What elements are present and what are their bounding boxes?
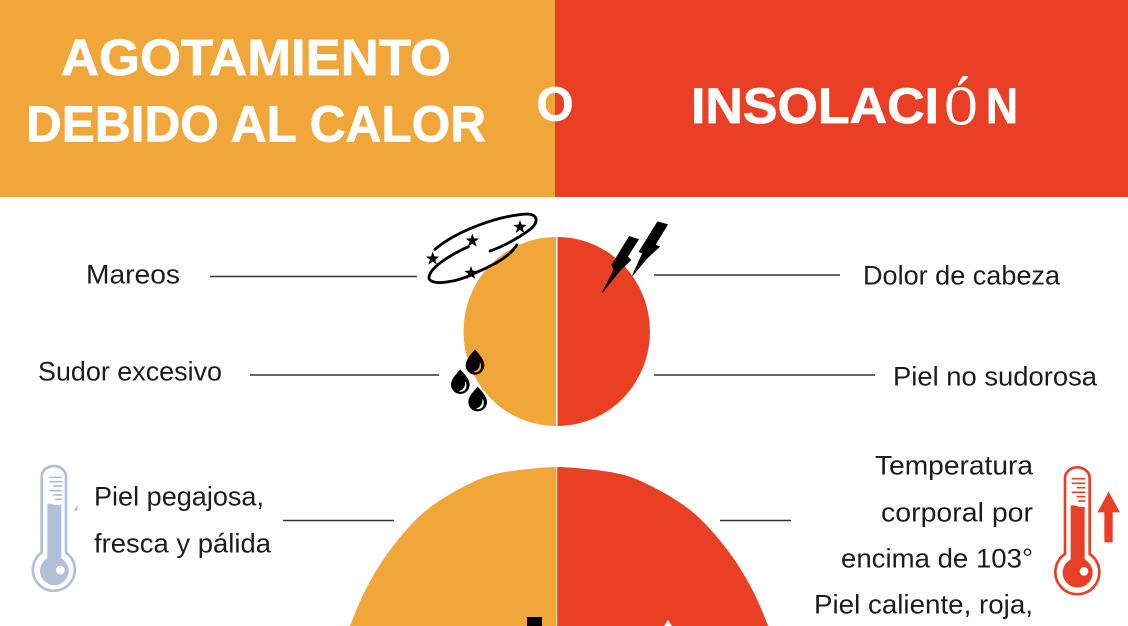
icon: cool thermometer xyxy=(33,466,77,591)
icon: sweat drops xyxy=(451,349,487,411)
label: dolor de cabeza: Dolor de cabeza xyxy=(863,260,1061,290)
icon: dizzy stars halo xyxy=(426,214,536,283)
body: left half xyxy=(350,467,556,626)
label: piel caliente, roja: Piel caliente, roja, xyxy=(814,590,1033,620)
icon: hot thermometer with arrow xyxy=(1055,467,1120,594)
label: piel no sudorosa: Piel no sudorosa xyxy=(893,362,1098,392)
title: insolación: INSOLACI xyxy=(691,78,939,134)
head: left half xyxy=(464,237,556,426)
label: sudor excesivo: Sudor excesivo xyxy=(38,356,222,386)
label: piel pegajosa, fresca y pálida xyxy=(94,482,272,558)
title: insolación: N xyxy=(986,78,1018,134)
head: right half xyxy=(558,237,650,426)
body: white notch xyxy=(664,620,672,626)
panel: red header xyxy=(555,0,1128,197)
icon: lightning bolts xyxy=(603,222,667,292)
title: agotamiento debido al calor: DEBIDO AL CALOR xyxy=(26,96,486,152)
body: right half xyxy=(557,467,768,626)
label: mareos: Mareos xyxy=(86,260,180,290)
title: agotamiento debido al calor xyxy=(26,29,486,152)
label: temperatura corporal xyxy=(841,450,1034,574)
label: temperatura corporal: corporal por xyxy=(881,498,1033,528)
panel: orange header xyxy=(0,0,555,197)
body: black detail xyxy=(527,617,542,626)
heading: connector O: O xyxy=(536,78,574,132)
label: temperatura corporal: encima de 103° xyxy=(841,544,1033,574)
label: temperatura corporal: Temperatura xyxy=(875,450,1034,480)
title: insolación: Ó xyxy=(945,75,977,136)
label: piel pegajosa, fresca y pálida: Piel pegajosa, xyxy=(94,482,264,512)
label: piel pegajosa, fresca y pálida: fresca y pálida xyxy=(94,528,272,558)
title: agotamiento debido al calor: AGOTAMIENTO xyxy=(61,29,451,86)
